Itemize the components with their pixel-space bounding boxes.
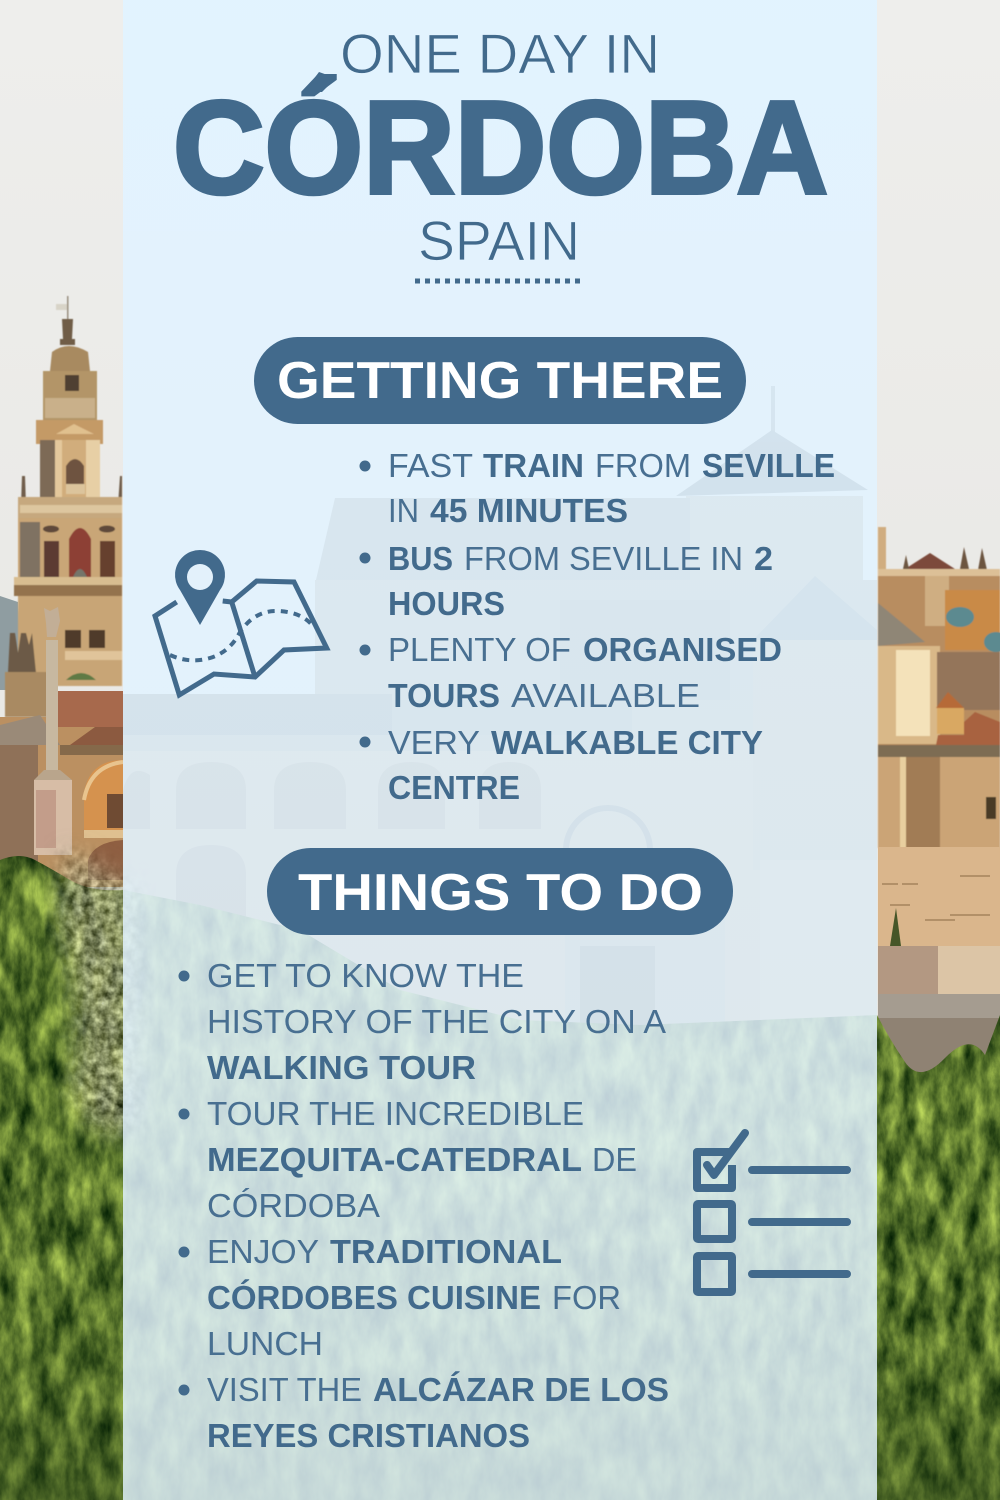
list: things to do [178,957,669,1454]
list: getting there: TOURS [388,677,500,714]
title: ONE DAY IN [340,22,660,85]
list: getting there: WALKABLE CITY [491,724,763,761]
list: getting there: VERY [388,724,480,761]
list: getting there: ORGANISED [583,631,782,668]
list: getting there: BUS [388,540,453,577]
list: things to do: GET TO KNOW THE [207,957,524,994]
list: getting there: PLENTY OF [388,631,571,668]
list: things to do: MEZQUITA-CATEDRAL [207,1141,582,1178]
list: getting there: HOURS [388,585,505,622]
list: getting there: FROM SEVILLE IN [464,540,743,577]
mosque-cathedral dome and walls seen behind the panel [123,386,877,1072]
terrace and river walls on the right [878,847,1000,1088]
list: getting there: SEVILLE [702,447,835,484]
icon: checklist [697,1133,847,1292]
list: things to do: CÓRDOBES CUISINE [207,1279,541,1316]
list: things to do: DE [592,1141,637,1178]
title: SPAIN [418,209,580,272]
bell tower [5,296,122,717]
title [173,22,828,272]
list: things to do: HISTORY OF THE CITY ON A [207,1003,666,1040]
translucent central panel [123,0,877,1500]
list: things to do: ENJOY [207,1233,319,1270]
trees along the river [0,856,1000,1500]
list: things to do: ALCÁZAR DE LOS [373,1371,669,1408]
dotted divider [415,278,582,284]
list: getting there: 2 [754,540,773,577]
list: getting there: CENTRE [388,769,520,806]
heading pill: getting there [254,337,746,424]
distant hill [0,596,22,690]
list: things to do: VISIT THE [207,1371,362,1408]
title: CÓRDOBA [173,74,828,221]
heading pill: getting there: GETTING THERE [277,352,723,410]
list: things to do: REYES CRISTIANOS [207,1417,530,1454]
list: getting there: IN [388,492,419,529]
lower tree shadow [0,1100,1000,1500]
list: things to do: TRADITIONAL [330,1233,562,1270]
cathedral wall below tower [0,691,124,887]
list: things to do: CÓRDOBA [207,1187,380,1224]
list: getting there: AVAILABLE [511,677,700,714]
right-hand cathedral buildings [878,527,1000,848]
list: things to do: WALKING TOUR [207,1049,476,1086]
icon: map with location pin [155,550,327,695]
heading pill: things to do: THINGS TO DO [298,864,703,922]
list: getting there: FAST [388,447,473,484]
list: things to do: LUNCH [207,1325,323,1362]
list: getting there: 45 MINUTES [430,492,628,529]
triumph column [34,607,72,855]
list: things to do: FOR [552,1279,621,1316]
list: things to do: TOUR THE INCREDIBLE [207,1095,584,1132]
list: getting there: FROM [595,447,691,484]
pale flowering shrubs [60,854,140,1135]
list: getting there: TRAIN [483,447,584,484]
list: getting there [360,447,835,806]
heading pill: things to do [267,848,733,935]
